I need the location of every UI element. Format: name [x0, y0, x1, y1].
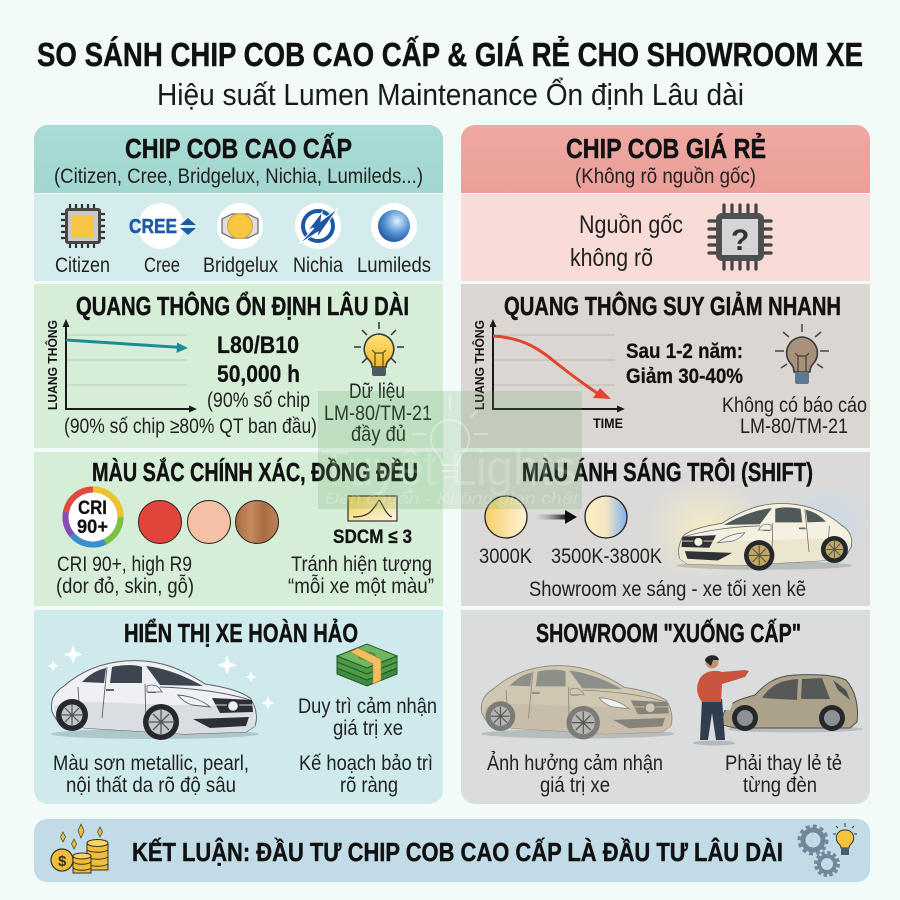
icon: gears and bulb: [799, 823, 857, 876]
note: 90 percent: (90% số chip: [207, 389, 310, 412]
icon: CRI ring: 90+: [77, 517, 108, 538]
text: value impact: giá trị xe: [540, 774, 610, 797]
panel: perfect display: [34, 610, 443, 804]
icon: unknown chip: ?: [731, 224, 749, 257]
swatch: wood: [236, 500, 278, 544]
text: avoid mismatch: [288, 553, 434, 598]
swatch: skin: [188, 500, 230, 544]
panel: premium header: [34, 125, 443, 193]
heading: cheap chip: CHIP COB GIÁ RẺ: [566, 132, 766, 164]
heading: accurate colour: MÀU SẮC CHÍNH XÁC, ĐỒNG ĐỀU: [92, 457, 418, 487]
chart: stable lumen line: LUANG THÔNG: [45, 320, 60, 410]
text: metallic paint: [53, 752, 249, 797]
icon: Nichia: [295, 203, 341, 249]
icon: Citizen chip: [61, 204, 105, 248]
glow behind car: [645, 480, 875, 580]
text: showroom uneven: Showroom xe sáng - xe tối xen kẽ: [529, 578, 806, 601]
text: full data: Dữ liệu: [349, 380, 405, 403]
illustration: hatchback: [722, 675, 863, 732]
text: piecemeal replacement: [725, 752, 842, 797]
panel: unknown origin: [461, 194, 870, 281]
text: CRI: [56, 553, 194, 598]
cheap chip subtitle: (Không rõ nguồn gốc): [575, 165, 756, 188]
panel: degraded showroom: [461, 610, 870, 804]
text: value perception: [298, 695, 437, 740]
icon: Cree logo: [129, 203, 196, 249]
heading: degraded showroom: SHOWROOM "XUỐNG CẤP": [536, 618, 801, 648]
icon: coins: $: [58, 853, 67, 870]
conclusion banner: [34, 819, 870, 882]
text: full data: LM-80/TM-21: [324, 402, 432, 425]
text: avoid mismatch: “mỗi xe một màu”: [288, 575, 434, 598]
text: metallic paint: Màu sơn metallic, pearl,: [53, 752, 249, 775]
label: Nichia: Nichia: [293, 254, 343, 277]
panel: colour shift: [461, 452, 875, 606]
heading: perfect display: HIỂN THỊ XE HOÀN HẢO: [124, 618, 358, 648]
metric: L80/B10: L80/B10: [217, 332, 299, 359]
metric: decay: [626, 340, 743, 388]
arrow: shift: [537, 510, 577, 524]
text: CRI: CRI 90+, high R9: [57, 553, 192, 576]
text: value impact: Ảnh hưởng cảm nhận: [487, 752, 663, 775]
panel: cheap header: [461, 125, 870, 193]
text: value impact: [487, 752, 663, 797]
metric: decay: Sau 1-2 năm:: [626, 340, 743, 363]
icon: dim bulb: [775, 324, 829, 384]
label: Cree: Cree: [144, 254, 180, 277]
illustration: dull car: [481, 666, 674, 739]
text: no report: [722, 394, 867, 438]
swatch: red: [138, 500, 182, 544]
label: Bridgelux: Bridgelux: [203, 254, 278, 277]
text: metallic paint: nội thất da rõ độ sâu: [66, 774, 236, 797]
text: piecemeal replacement: Phải thay lẻ tẻ: [725, 752, 842, 775]
label: 3000K: 3000K: [479, 545, 532, 568]
icon: unknown chip: [709, 205, 771, 269]
text: value perception: giá trị xe: [333, 717, 403, 740]
text: unknown origin: không rõ: [570, 244, 653, 272]
text: unknown origin: [570, 211, 683, 272]
icon: Lumileds: [371, 203, 417, 249]
text: CRI: (dor đỏ, skin, gỗ): [56, 575, 194, 598]
icon: money stack: [337, 644, 397, 686]
note: 80 percent QT: (90% số chip ≥80% QT ban đầu): [64, 415, 317, 438]
text: maintenance plan: rõ ràng: [340, 774, 398, 797]
heading: colour shift: MÀU ÁNH SÁNG TRÔI (SHIFT): [522, 457, 813, 487]
icon: CRI ring: CRI: [78, 498, 107, 519]
text: maintenance plan: [299, 752, 433, 797]
text: avoid mismatch: Tránh hiện tượng: [291, 553, 432, 576]
label: 3500K-3800K: 3500K-3800K: [551, 545, 662, 568]
subtitle: Hiệu suất Lumen Maintenance Ổn định Lâu dài: [157, 76, 744, 112]
text: no report: Không có báo cáo: [722, 394, 867, 417]
icon: bright bulb: [354, 322, 404, 376]
heading: premium chip: CHIP COB CAO CẤP: [125, 133, 352, 164]
illustration: yellowed car: [676, 504, 852, 571]
metric: SDCM: SDCM ≤ 3: [333, 527, 412, 548]
text: unknown origin: Nguồn gốc: [579, 211, 683, 239]
icon: coins: [51, 824, 108, 873]
chart: stable lumen line: [45, 319, 197, 412]
icon: CRI ring: [65, 490, 120, 545]
text: full data: đầy đủ: [351, 423, 406, 446]
metric: decay: Giảm 30-40%: [626, 365, 743, 388]
chart: decay curve: [472, 319, 625, 431]
panel: accurate colour: [34, 452, 443, 606]
premium brands subtitle: (Citizen, Cree, Bridgelux, Nichia, Lumileds...): [54, 165, 423, 188]
text: value perception: Duy trì cảm nhận: [298, 695, 437, 718]
watermark name: Tuyệt Lights: [320, 440, 576, 496]
panel: fast decay: [461, 284, 870, 448]
chart: decay curve: TIME: [593, 415, 623, 431]
swatch: 3500K-3800K: [585, 496, 627, 538]
watermark bulb: [412, 393, 488, 477]
label: Lumileds: Lumileds: [357, 254, 431, 277]
icon: sparkles: [47, 645, 275, 710]
conclusion text: KẾT LUẬN: ĐẦU TƯ CHIP COB CAO CẤP LÀ ĐẦU TƯ LÂU DÀI: [132, 837, 783, 867]
text: maintenance plan: Kế hoạch bảo trì: [299, 752, 433, 775]
watermark tagline: Đèn chuẩn - Không gian chất: [325, 489, 579, 508]
watermark: [318, 391, 582, 509]
metric: 50,000 h: 50,000 h: [217, 361, 300, 388]
swatch: 3000K: [485, 496, 527, 538]
illustration: person pointing: [693, 655, 749, 746]
icon: spectrum box: [348, 496, 397, 521]
panel: stable lumen: [34, 284, 443, 448]
icon: Cree logo: CREE: [129, 216, 177, 238]
illustration: silver car: [51, 661, 259, 740]
text: piecemeal replacement: từng đèn: [743, 774, 817, 797]
chart: decay curve: LUANG THÔNG: [472, 320, 487, 410]
icon: Bridgelux: [217, 203, 263, 249]
label: Citizen: Citizen: [55, 254, 110, 277]
heading: stable lumen: QUANG THÔNG ỔN ĐỊNH LÂU DÀI: [76, 291, 409, 321]
panel: brand logos: [34, 194, 443, 281]
text: no report: LM-80/TM-21: [740, 415, 848, 438]
text: full data: [324, 380, 432, 446]
